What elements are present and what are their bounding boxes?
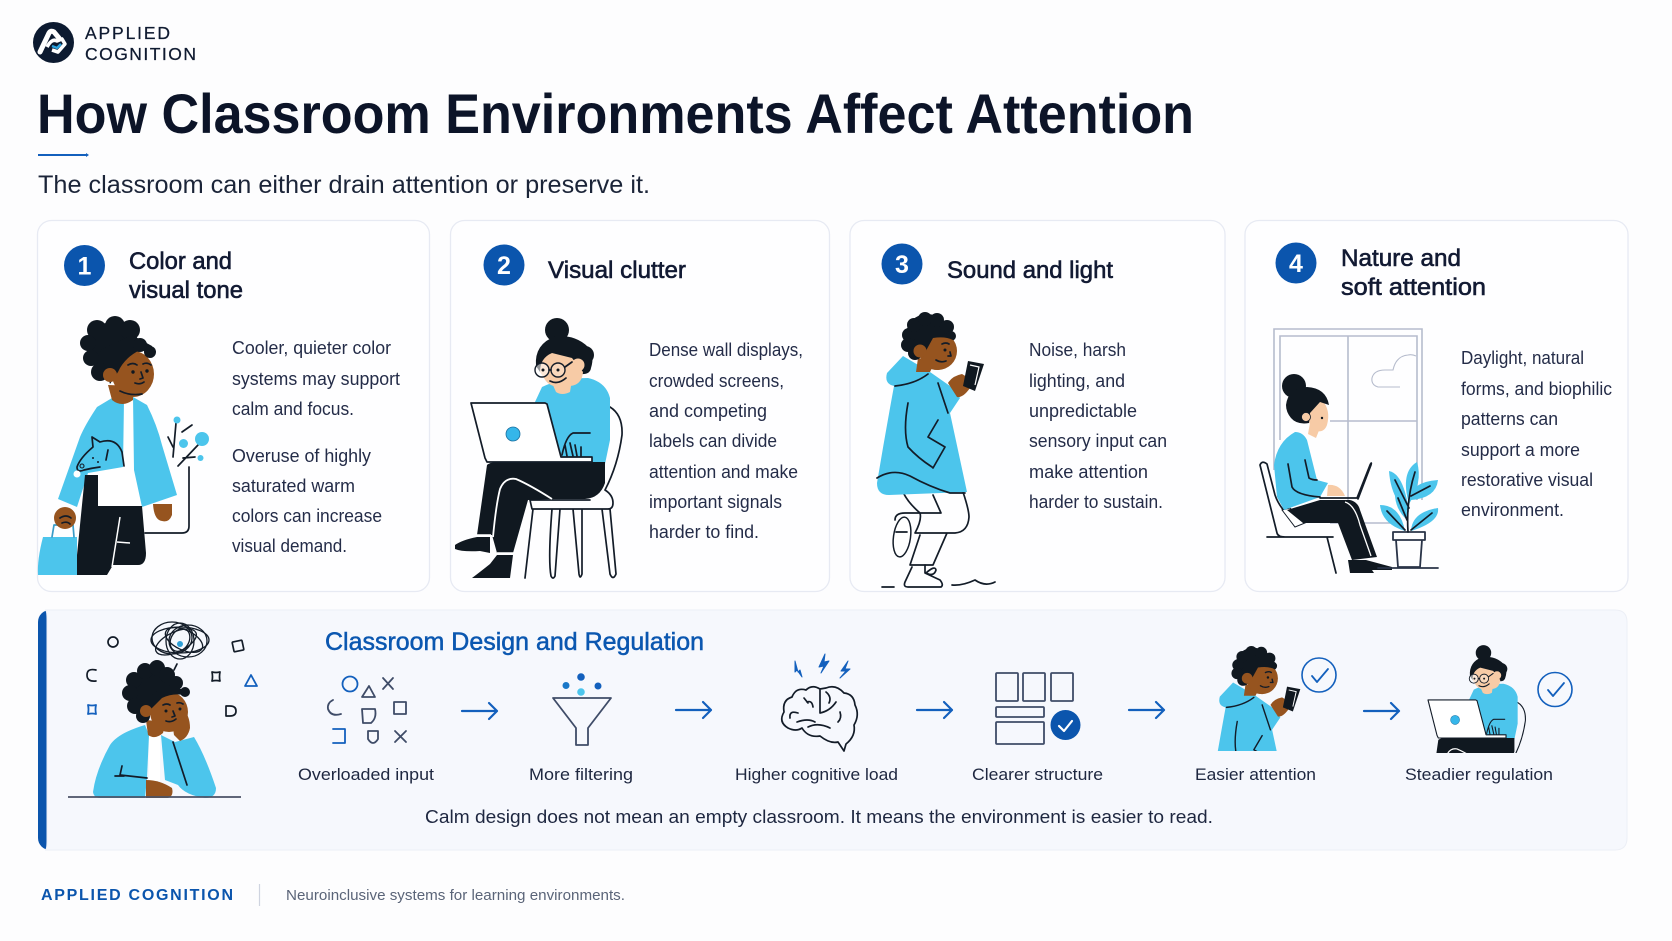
card 3 body text: make attention — [1029, 462, 1148, 482]
step: steadier regulation — [1406, 645, 1573, 784]
icon: person on laptop — [1428, 645, 1526, 753]
logo wordmark — [85, 23, 196, 64]
card 3 body text: harder to sustain. — [1029, 492, 1163, 512]
heading: color and visual tone: visual tone — [129, 277, 243, 304]
card 1 body text: colors can increase — [232, 506, 382, 526]
card 4 body text: support a more — [1461, 440, 1580, 460]
badge 2 — [484, 244, 524, 286]
step: more filtering — [529, 673, 633, 784]
step: clearer structure: Clearer structure — [972, 765, 1103, 784]
heading: color and visual tone — [129, 248, 243, 304]
illustration: window, seated person with laptop and plant — [1260, 329, 1438, 573]
card 2 body text — [649, 340, 803, 542]
subtitle: The classroom can either drain attention or preserve it. — [38, 171, 650, 199]
card 2 body text: and competing — [649, 401, 767, 421]
icon: person with phone — [1218, 646, 1300, 751]
icon: check circle — [1538, 672, 1572, 706]
card 4 body text: Daylight, natural — [1461, 348, 1584, 368]
heading: nature and soft attention: soft attention — [1341, 274, 1486, 301]
logo wordmark: APPLIED — [85, 23, 170, 43]
illustration: hoodie torso and phone — [877, 312, 984, 495]
footer brand: APPLIED COGNITION — [41, 887, 233, 904]
card 1 body text: Cooler, quieter color — [232, 338, 391, 358]
card 4 body text — [1461, 348, 1612, 520]
card 1 body text: systems may support — [232, 369, 400, 389]
arrow — [676, 702, 711, 718]
step: clearer structure — [972, 673, 1103, 784]
step: steadier regulation: Steadier regulation — [1405, 765, 1553, 784]
step: overloaded input: Overloaded input — [298, 765, 434, 784]
icon: funnel — [553, 673, 611, 745]
logo — [33, 22, 196, 64]
section heading: Classroom Design and Regulation — [325, 628, 704, 656]
illustration: overwhelmed person at desk — [68, 622, 257, 798]
card 2 body text: harder to find. — [649, 522, 759, 542]
heading: visual clutter: Visual clutter — [548, 257, 686, 284]
panel: visual clutter — [450, 220, 830, 592]
caption: Calm design does not mean an empty classroom. It means the environment is easier to read. — [425, 806, 1213, 827]
panel: classroom design and regulation — [38, 610, 1627, 850]
badge 4: 4 — [1289, 250, 1303, 278]
badge 3: 3 — [895, 251, 909, 279]
badge 2: 2 — [497, 252, 511, 280]
illustration: person with tote bag and branch — [38, 316, 209, 575]
arrow — [1364, 703, 1399, 719]
card 1 body text — [232, 338, 400, 556]
card 2 body text: crowded screens, — [649, 371, 784, 391]
illustration: person on laptop in chair — [455, 318, 622, 578]
step: easier attention — [1196, 646, 1337, 780]
logo mark — [33, 22, 74, 63]
icon: organized grid with check — [996, 673, 1080, 744]
panel: nature and soft attention — [1245, 220, 1628, 592]
step: overloaded input — [298, 676, 434, 784]
heading: nature and soft attention: Nature and — [1341, 245, 1461, 272]
icon: scattered shapes — [328, 676, 406, 743]
card 3 body text: sensory input can — [1029, 431, 1167, 451]
badge 3 — [882, 244, 922, 284]
card 3 body text: lighting, and — [1029, 371, 1125, 391]
arrow — [917, 702, 952, 718]
step: higher cognitive load: Higher cognitive load — [735, 765, 898, 784]
footer tagline: Neuroinclusive systems for learning environments. — [286, 887, 625, 904]
card 3 body text: unpredictable — [1029, 401, 1137, 421]
panel: sound and light — [850, 220, 1225, 592]
badge 1: 1 — [78, 252, 92, 280]
heading: color and visual tone: Color and — [129, 248, 232, 275]
card 1 body text: Overuse of highly — [232, 446, 371, 466]
card 4 body text: forms, and biophilic — [1461, 379, 1612, 399]
card 4 body text: restorative visual — [1461, 470, 1593, 490]
step: more filtering: More filtering — [529, 765, 633, 784]
card 2 body text: important signals — [649, 492, 782, 512]
step: higher cognitive load — [735, 654, 898, 784]
card 1 body text: calm and focus. — [232, 399, 354, 419]
step: easier attention: Easier attention — [1195, 765, 1316, 784]
footer — [41, 884, 625, 906]
arrow — [1129, 702, 1164, 718]
badge 1 — [64, 245, 105, 286]
badge 4 — [1276, 242, 1316, 284]
card 1 body text: saturated warm — [232, 476, 355, 496]
illustration: person in hoodie looking at phone — [882, 477, 995, 587]
card 2 body text: Dense wall displays, — [649, 340, 803, 360]
title arrow rule — [38, 153, 89, 157]
card 3 body text — [1029, 340, 1167, 512]
card 4 body text: patterns can — [1461, 409, 1558, 429]
heading: sound and light: Sound and light — [947, 257, 1113, 284]
card 1 body text: visual demand. — [232, 536, 347, 556]
title: How Classroom Environments Affect Attention — [37, 82, 1194, 145]
panel: color and visual tone — [38, 220, 430, 592]
logo wordmark: COGNITION — [85, 44, 196, 64]
icon: brain with lightning — [782, 654, 857, 751]
card 4 body text: environment. — [1461, 500, 1564, 520]
card 2 body text: labels can divide — [649, 431, 777, 451]
card 3 body text: Noise, harsh — [1029, 340, 1126, 360]
card 2 body text: attention and make — [649, 462, 798, 482]
icon: check circle — [1302, 658, 1336, 692]
heading: nature and soft attention — [1341, 245, 1486, 301]
arrow — [462, 703, 497, 719]
